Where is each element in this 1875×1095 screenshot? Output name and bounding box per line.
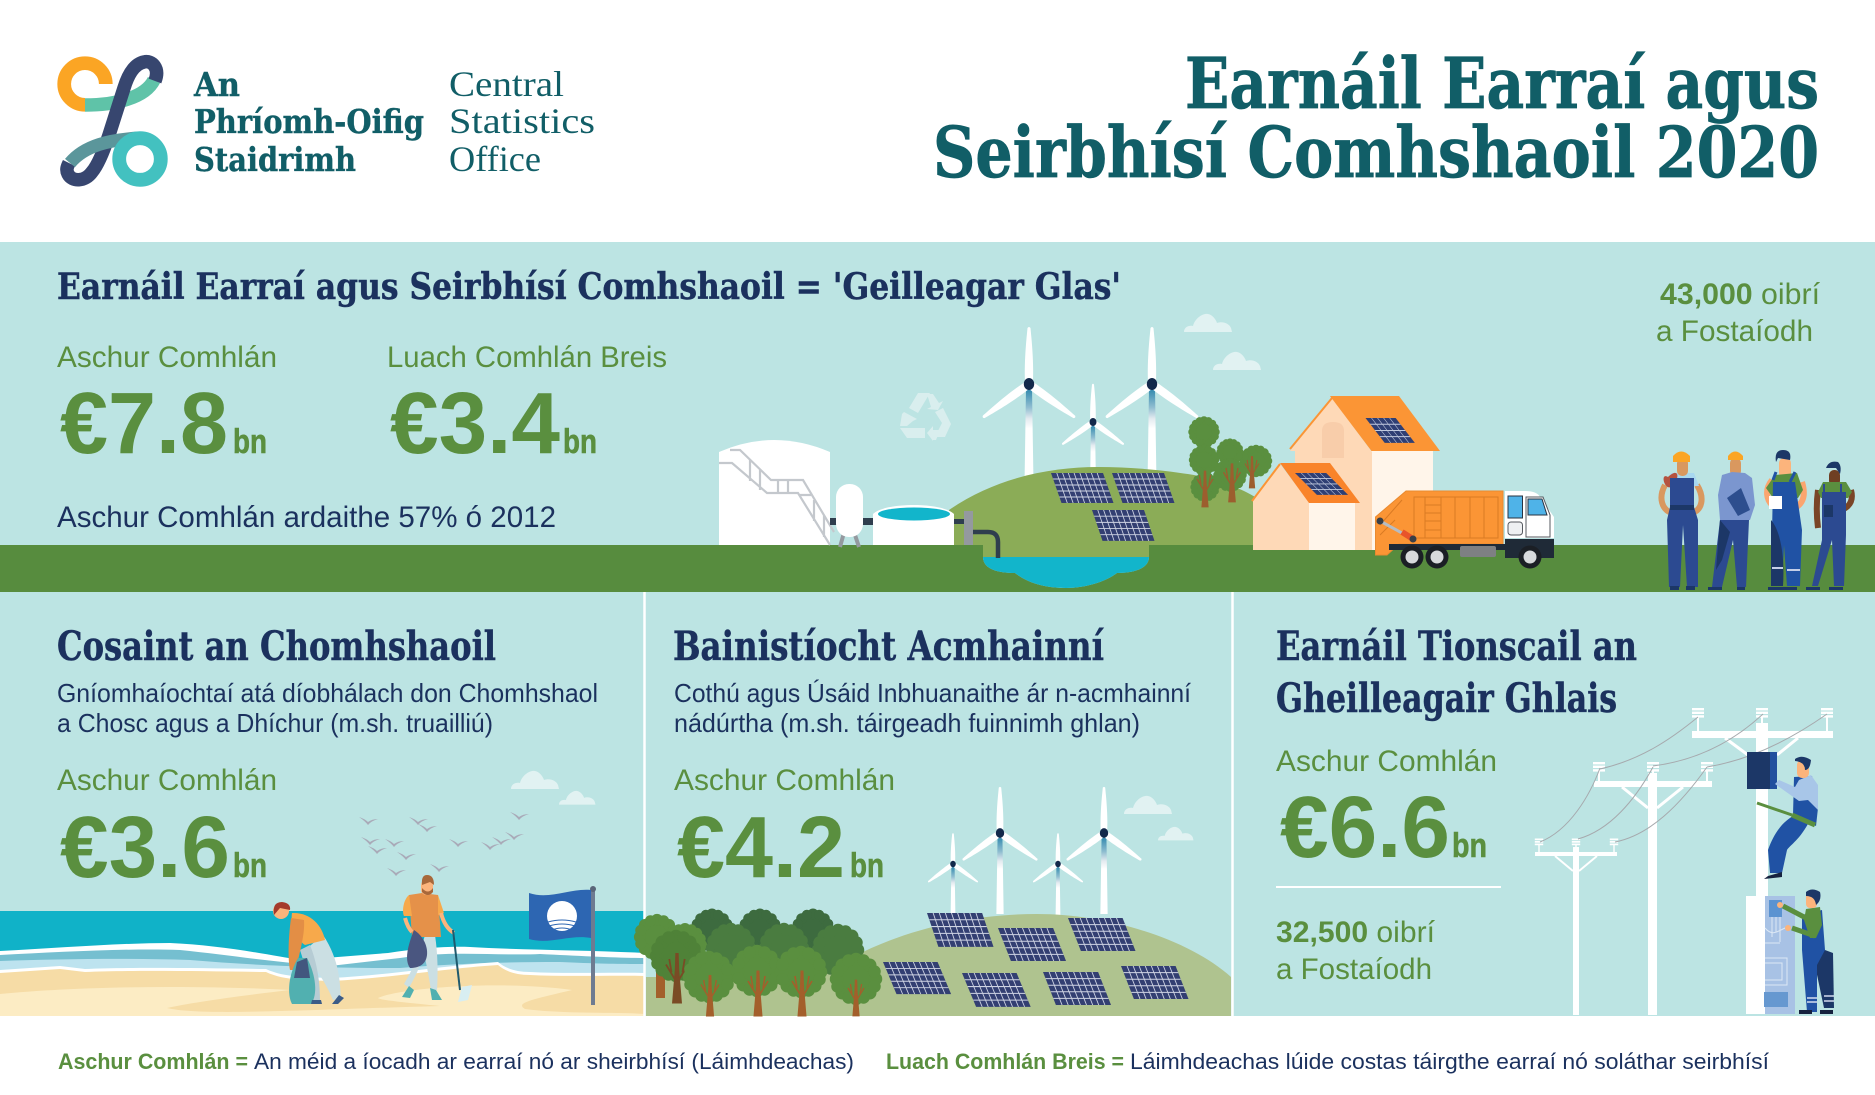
definition: gross value added: Luach Comhlán Breis = (886, 1049, 1124, 1074)
icon: worker in green shirt (1806, 462, 1852, 590)
stat: gross output 3.6bn (57, 764, 277, 896)
stat: gross output 7.8bn: bn (233, 423, 267, 461)
title (933, 42, 1819, 194)
heading: green economy industry: Earnáil Tionscail an (1276, 623, 1637, 670)
stat: gross output 7.8bn: Aschur Comhlán (57, 341, 277, 374)
sea (0, 911, 645, 1016)
stat: gross output 4.2bn: Aschur Comhlán (674, 764, 895, 797)
figure: electrician climbing pole (1757, 757, 1818, 879)
description: Gníomhaíochtaí atá díobhálach don Chomhshaol (57, 678, 598, 708)
definition: gross output: An méid a íocadh ar earraí nó ar sheirbhísí (Láimhdeachas) (254, 1049, 854, 1074)
heading: environmental protection: Cosaint an Chomhshaoil (57, 623, 496, 670)
icon: recycling truck (1376, 491, 1554, 568)
panel: environmental protection (0, 623, 645, 1016)
logo text: English name: Statistics (449, 101, 595, 141)
icon: blue flag (529, 886, 596, 1005)
stat: gross output 6.6bn (1276, 745, 1497, 876)
stat: 43,000 workers (1656, 278, 1821, 348)
stat: gross output 7.8bn: €7.8 (60, 375, 228, 472)
logo text: Irish name: Phríomh-Oifig (194, 102, 424, 141)
description (674, 678, 1192, 738)
panel: green economy overview (57, 266, 1821, 534)
background band (0, 242, 1875, 1016)
logo text: English name: Central (449, 64, 564, 104)
icon: solar farm (883, 913, 1188, 1007)
stat: gross output 4.2bn (674, 764, 895, 896)
icon: solar panels on hill (1051, 473, 1174, 541)
ground strip (0, 545, 1875, 592)
icon: recycling symbol (900, 393, 951, 441)
definition: gross output: Aschur Comhlán = (58, 1049, 248, 1074)
description: Cothú agus Úsáid Inbhuanaithe ár n-acmhainní (674, 678, 1192, 708)
icon: wind turbines (980, 327, 1201, 489)
icon: worker with tablet (1708, 452, 1755, 590)
icon: electrical cabinet (1746, 896, 1795, 1014)
illustration: green economy landscape (0, 314, 1875, 592)
pond (983, 557, 1149, 588)
icon: CSO infinity mark (64, 62, 161, 180)
icon: worker with clipboard (1766, 450, 1804, 590)
panel dividers (644, 592, 1232, 1016)
icon: trees (1188, 416, 1272, 507)
stat: gross output 4.2bn: €4.2 (677, 799, 845, 896)
sand highlights (0, 985, 645, 1016)
definition: gross value added: Láimhdeachas lúide costas táirgthe earraí nó soláthar seirbhísí (1130, 1049, 1770, 1074)
heading: resource management: Bainistíocht Acmhainní (673, 623, 1104, 670)
icon: process vessel (830, 484, 875, 547)
logo text: Irish name (193, 65, 424, 179)
icon: wind turbines (927, 787, 1143, 918)
logo text: English name: Office (449, 139, 541, 179)
heading: green economy industry (1276, 623, 1637, 722)
figure: man with litter picker (402, 875, 472, 1002)
icon: worker with ponytail and helmet (1661, 452, 1702, 590)
hill (945, 467, 1260, 557)
icon: storage tank and stairs (719, 440, 834, 545)
description (57, 678, 598, 738)
stat: gross output 3.6bn: €3.6 (60, 799, 230, 896)
heading: green economy industry: Gheilleagair Ghlais (1276, 675, 1617, 722)
birds (359, 812, 529, 876)
logo text: Irish name: An (193, 65, 240, 104)
footer definitions (58, 1049, 1770, 1074)
stat: 43,000 workers: 43,000 oibrí (1660, 278, 1821, 311)
stat: gross output 6.6bn: €6.6 (1280, 779, 1450, 876)
icon: forest (634, 908, 882, 1016)
heading: green economy: Earnáil Earraí agus Seirbhísí Comhshaoil = 'Geilleagar Glas' (57, 266, 1121, 308)
figure: woman collecting litter (273, 902, 344, 1004)
clouds (1124, 796, 1194, 840)
stat: gross output 3.6bn: bn (233, 847, 267, 885)
logo text: Irish name: Staidrimh (194, 140, 356, 179)
logo: Central Statistics Office (64, 62, 595, 180)
icon: electrical box on pole (1747, 752, 1777, 789)
waves (0, 943, 645, 990)
icon: water basin (873, 505, 998, 558)
icon: utility poles (1535, 708, 1833, 1015)
logo text: English name (449, 64, 595, 179)
description: nádúrtha (m.sh. táirgeadh fuinnimh ghlan) (674, 708, 1140, 738)
sand (0, 962, 645, 1016)
stat: gross output 6.6bn: bn (1452, 827, 1487, 865)
stat: gross output 3.6bn: Aschur Comhlán (57, 764, 277, 797)
panel: resource management (634, 623, 1231, 1016)
stat: gross value added 3.4bn (387, 341, 667, 472)
figure: electrician at cabinet (1777, 890, 1834, 1014)
hill (646, 914, 1231, 1016)
icon: clouds (1184, 314, 1261, 370)
stat: 32,500 workers: a Fostaíodh (1276, 953, 1432, 986)
stat: gross output 6.6bn: Aschur Comhlán (1276, 745, 1497, 778)
stat: 32,500 workers (1276, 916, 1436, 986)
stat: gross output 4.2bn: bn (850, 847, 884, 885)
icon: houses with solar roofs (1252, 396, 1440, 550)
stat: gross value added 3.4bn: Luach Comhlán Breis (387, 341, 667, 374)
illustration: power lines and electricians (1535, 708, 1834, 1015)
text: output rise since 2012: Aschur Comhlán ardaithe 57% ó 2012 (57, 501, 556, 534)
description: a Chosc agus a Dhíchur (m.sh. truailliú) (57, 708, 493, 738)
stat: gross output 7.8bn (57, 341, 277, 472)
clouds (511, 771, 595, 805)
stat: gross value added 3.4bn: bn (563, 423, 597, 461)
panel: green economy industry (1276, 623, 1834, 1015)
stat: 43,000 workers: a Fostaíodh (1656, 315, 1813, 348)
power cables (1540, 714, 1827, 842)
stat: 32,500 workers: 32,500 oibrí (1276, 916, 1436, 949)
beach illustration (0, 771, 645, 1016)
stat: gross value added 3.4bn: €3.4 (390, 375, 560, 472)
